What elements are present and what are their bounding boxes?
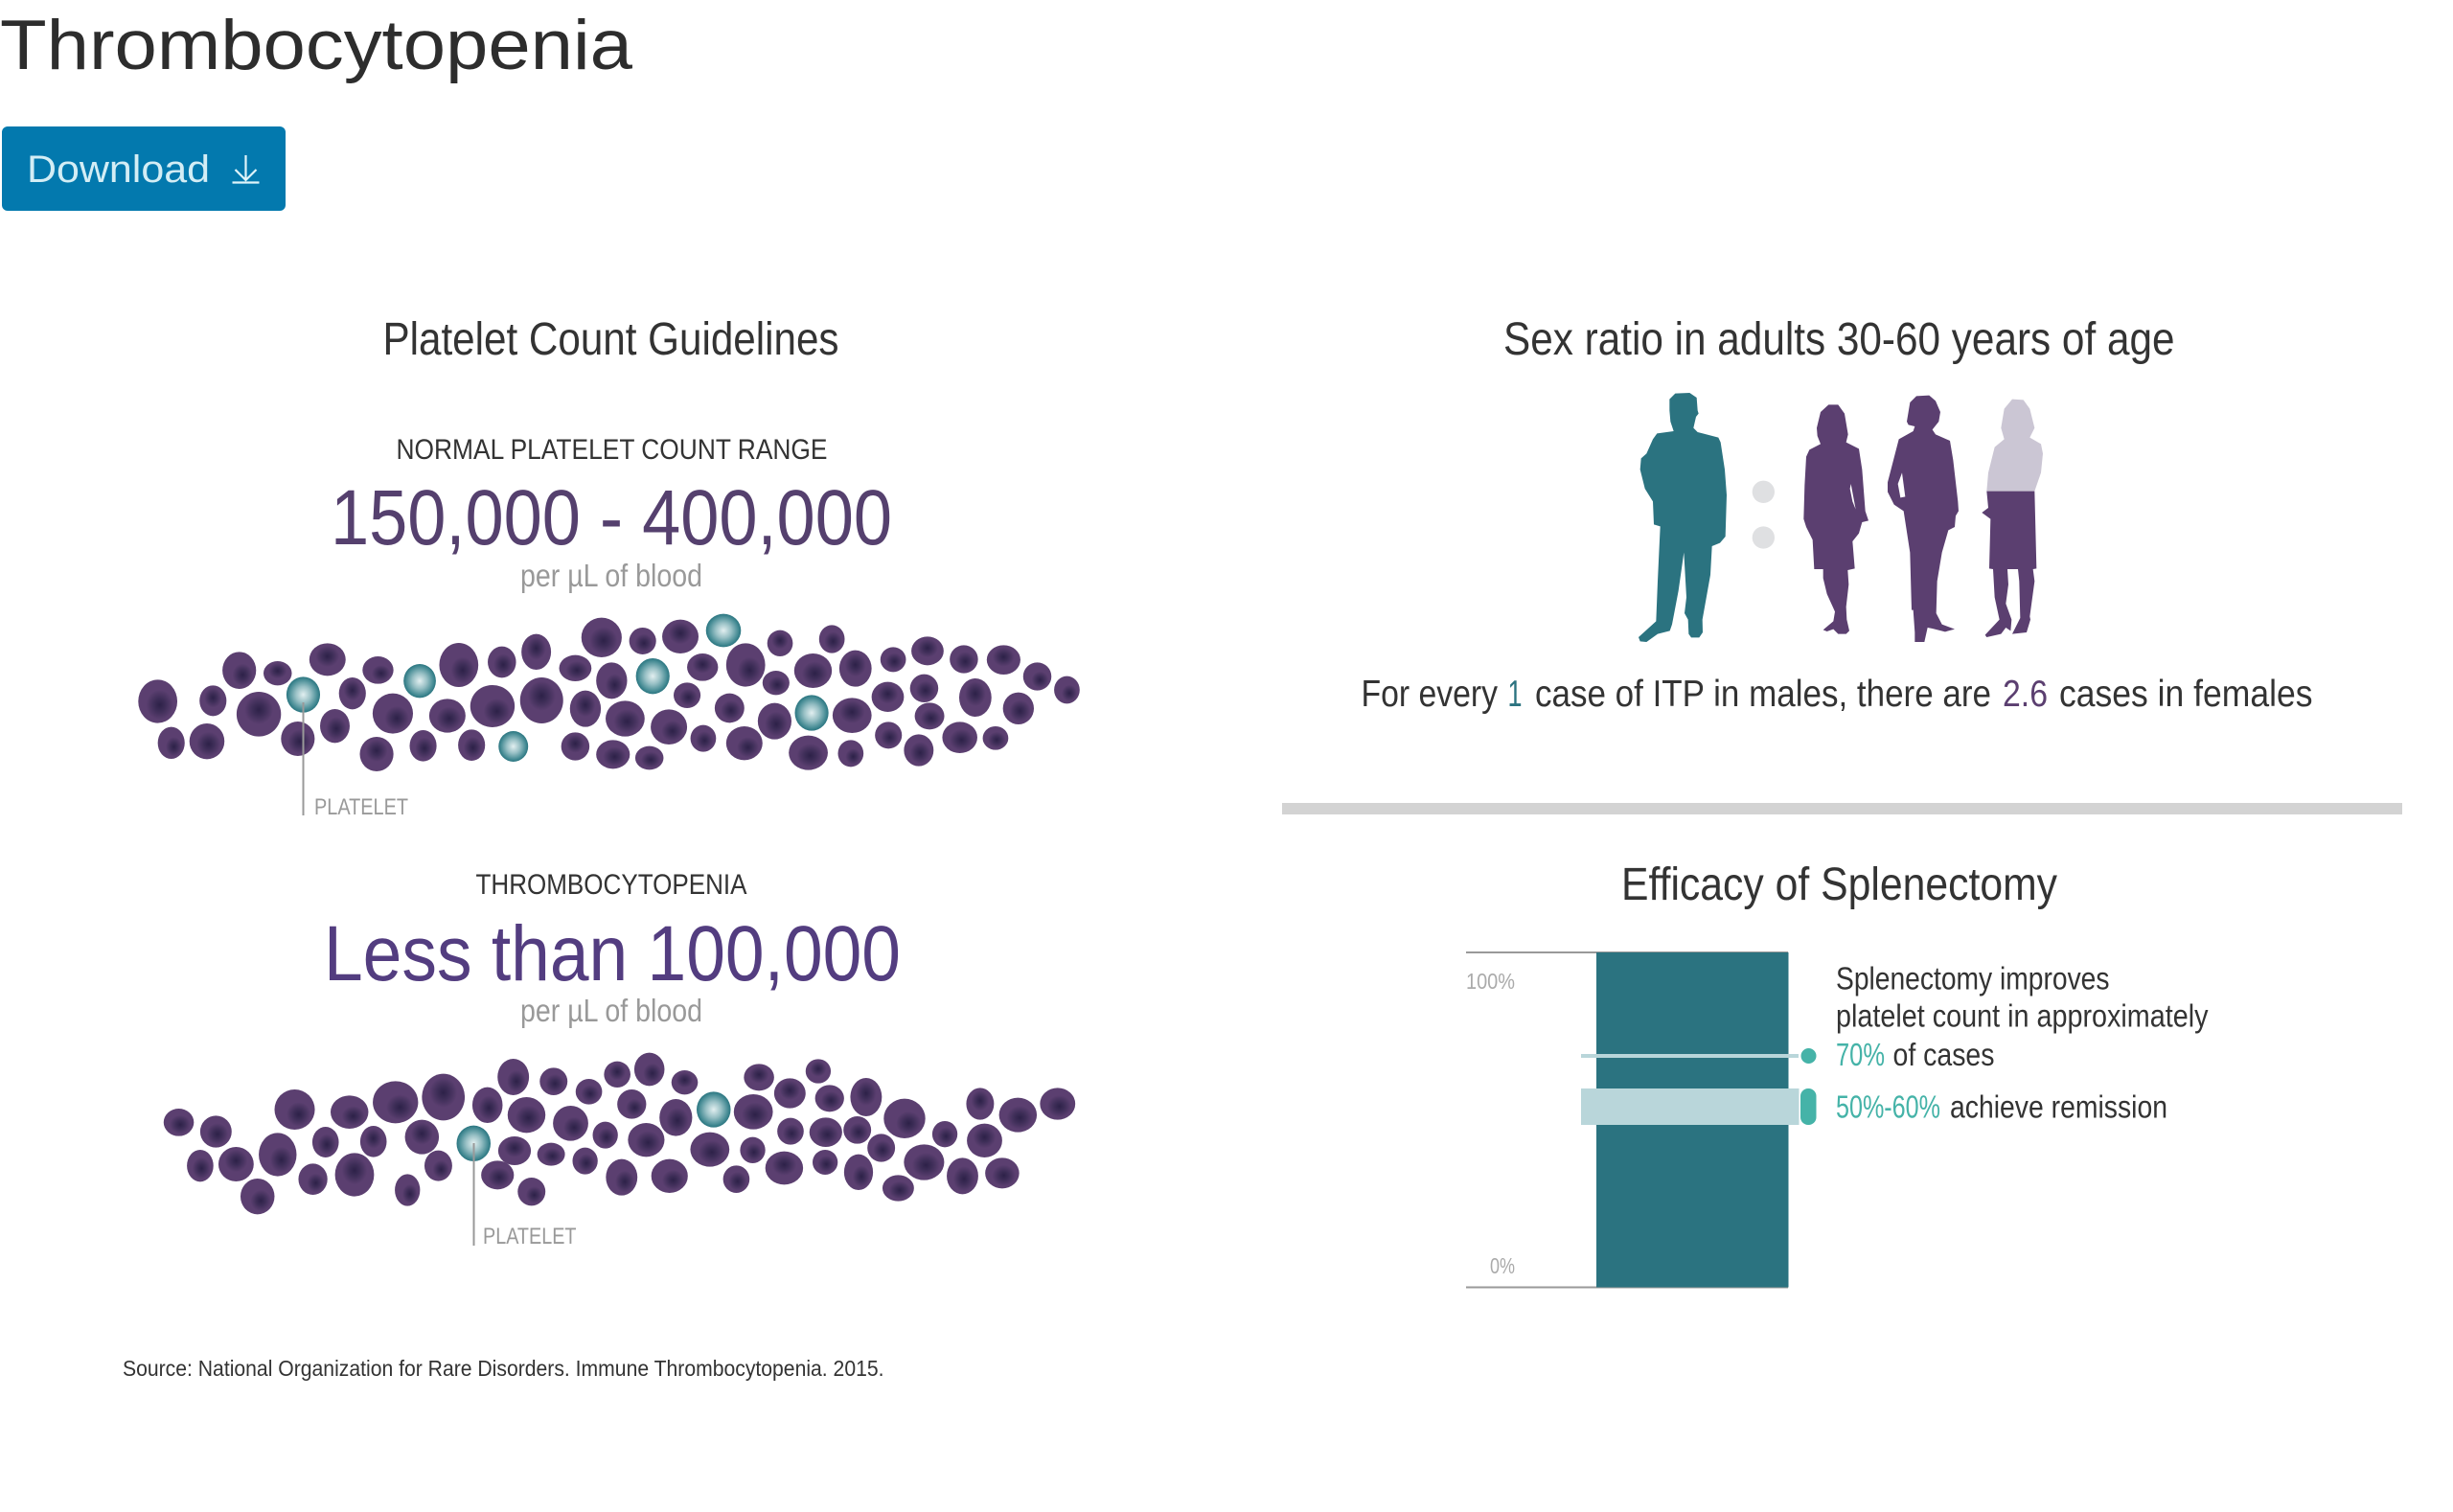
illustration: normal blood smear [138, 614, 1080, 771]
efficacy text: achieve remission [1950, 1088, 2167, 1125]
unit: per microlitre: per µL of blood [520, 558, 702, 593]
heading: platelet count guidelines: Platelet Count Guidelines [383, 314, 839, 365]
subheading: thrombocytopenia: THROMBOCYTOPENIA [475, 869, 747, 901]
axis label: 100 percent: 100% [1466, 969, 1515, 994]
ratio statement [1361, 674, 2313, 715]
figure: low count: Less than 100,000 [324, 910, 901, 997]
efficacy text: 50%-60% [1836, 1088, 1940, 1125]
panel: platelet count guidelines [138, 314, 1080, 1249]
download button: Download [27, 149, 210, 191]
ratio statement: cases in females [2059, 674, 2313, 715]
efficacy text: platelet count in approximately [1836, 998, 2209, 1033]
icon: ratio colon [1753, 481, 1775, 549]
source note: Source: National Organization for Rare Disorders. Immune Thrombocytopenia. 2015. [123, 1356, 883, 1381]
subheading: normal range: NORMAL PLATELET COUNT RANGE [397, 434, 828, 466]
unit: per microlitre: per µL of blood [520, 993, 702, 1028]
bar chart [1466, 951, 1817, 1288]
callout: platelet label [473, 1143, 577, 1249]
panel: sex ratio [1361, 314, 2313, 715]
icon: partial female silhouette [1982, 400, 2043, 637]
ratio statement: 2.6 [2003, 674, 2048, 715]
heading: sex ratio: Sex ratio in adults 30-60 years of age [1503, 314, 2175, 365]
callout: platelet label: PLATELET [483, 1224, 577, 1249]
ratio statement: For every [1361, 674, 1498, 715]
illustration: thrombocytopenia blood smear [164, 1053, 1075, 1214]
title: Thrombocytopenia [0, 7, 632, 84]
illustration: silhouettes [1639, 393, 2043, 642]
efficacy text: of cases [1893, 1037, 1995, 1072]
chart bar [1596, 952, 1788, 1288]
efficacy text [1836, 960, 2209, 1125]
callout: platelet label [303, 702, 408, 820]
callout: platelet label: PLATELET [314, 794, 408, 820]
icon: male silhouette [1639, 393, 1727, 642]
ratio statement: 1 [1508, 674, 1522, 715]
efficacy text: 70% [1836, 1037, 1885, 1072]
panel: efficacy of splenectomy [1466, 859, 2209, 1288]
icon: download arrow [232, 155, 259, 182]
heading: efficacy: Efficacy of Splenectomy [1621, 859, 2057, 910]
figure: normal count: 150,000 - 400,000 [331, 474, 892, 561]
ratio statement: case of ITP in males, there are [1535, 674, 1991, 715]
download button [2, 126, 286, 211]
marker: 70 percent [1581, 1048, 1817, 1064]
divider [1282, 803, 2402, 814]
icon: female silhouette two [1888, 396, 1959, 642]
marker: 50 to 60 percent [1581, 1088, 1817, 1125]
icon: female silhouette one [1803, 404, 1868, 634]
efficacy text: Splenectomy improves [1836, 960, 2110, 997]
axis label: 0 percent: 0% [1490, 1253, 1515, 1278]
